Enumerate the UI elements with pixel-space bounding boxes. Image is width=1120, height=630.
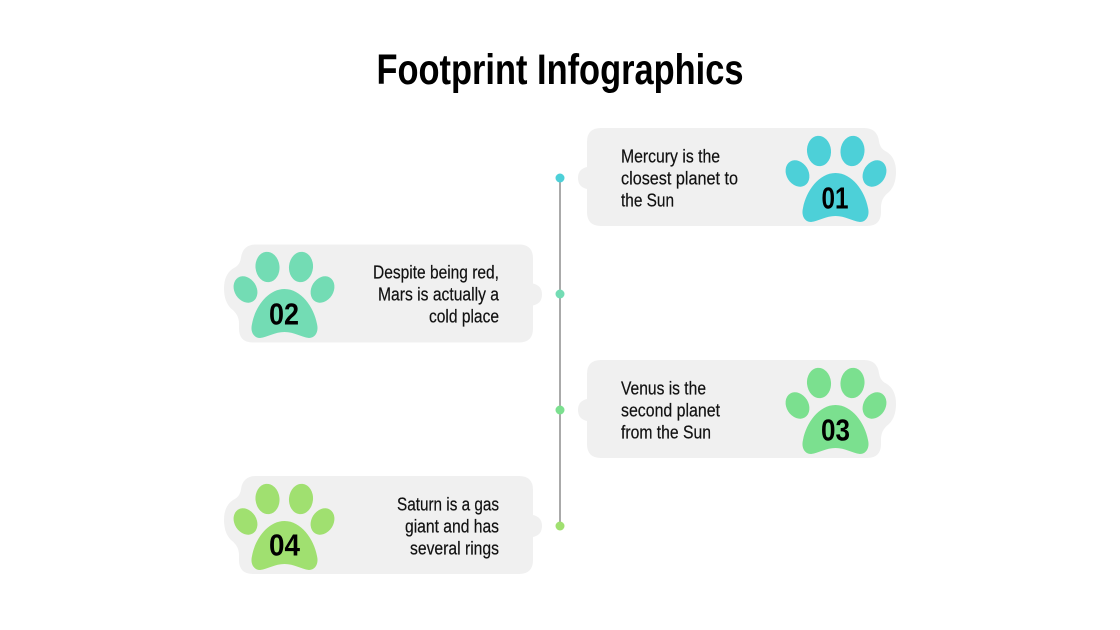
text 04 — [397, 495, 499, 559]
text 03: second planet — [621, 401, 720, 421]
text 03: Venus is the — [621, 379, 706, 399]
text 04: giant and has — [405, 517, 499, 537]
text 01 — [621, 147, 738, 211]
card background 03 — [578, 360, 896, 458]
text 02: cold place — [429, 307, 499, 327]
card background 04 — [224, 476, 542, 574]
number 01: 01 — [822, 180, 848, 216]
title: Footprint Infographics — [376, 46, 744, 94]
card 02 — [224, 244, 564, 342]
text 01: Mercury is the — [621, 147, 720, 167]
card background 02 — [224, 244, 542, 342]
timeline dot 03 — [556, 406, 564, 414]
text 02 — [373, 263, 500, 327]
text 03: from the Sun — [621, 423, 711, 443]
text 04: Saturn is a gas — [397, 495, 499, 515]
card 03 — [556, 360, 896, 458]
number 04: 04 — [269, 528, 301, 562]
text 04: several rings — [410, 539, 499, 559]
text 03 — [621, 379, 720, 443]
number 03: 03 — [821, 412, 850, 448]
card 04 — [224, 476, 564, 574]
number 02: 02 — [269, 296, 299, 332]
icon: paw 02 — [229, 251, 339, 338]
timeline dot 02 — [556, 290, 564, 298]
timeline dot 01 — [556, 174, 564, 182]
icon: paw 01 — [781, 135, 891, 222]
timeline dot 04 — [556, 522, 564, 530]
icon: paw 04 — [229, 483, 339, 570]
text 02: Despite being red, — [373, 263, 499, 283]
text 01: closest planet to — [621, 169, 738, 189]
text 02: Mars is actually a — [378, 285, 500, 305]
card background 01 — [578, 128, 896, 226]
icon: paw 03 — [781, 367, 891, 454]
timeline line — [559, 178, 561, 526]
text 01: the Sun — [621, 191, 674, 211]
card 01 — [556, 128, 896, 226]
